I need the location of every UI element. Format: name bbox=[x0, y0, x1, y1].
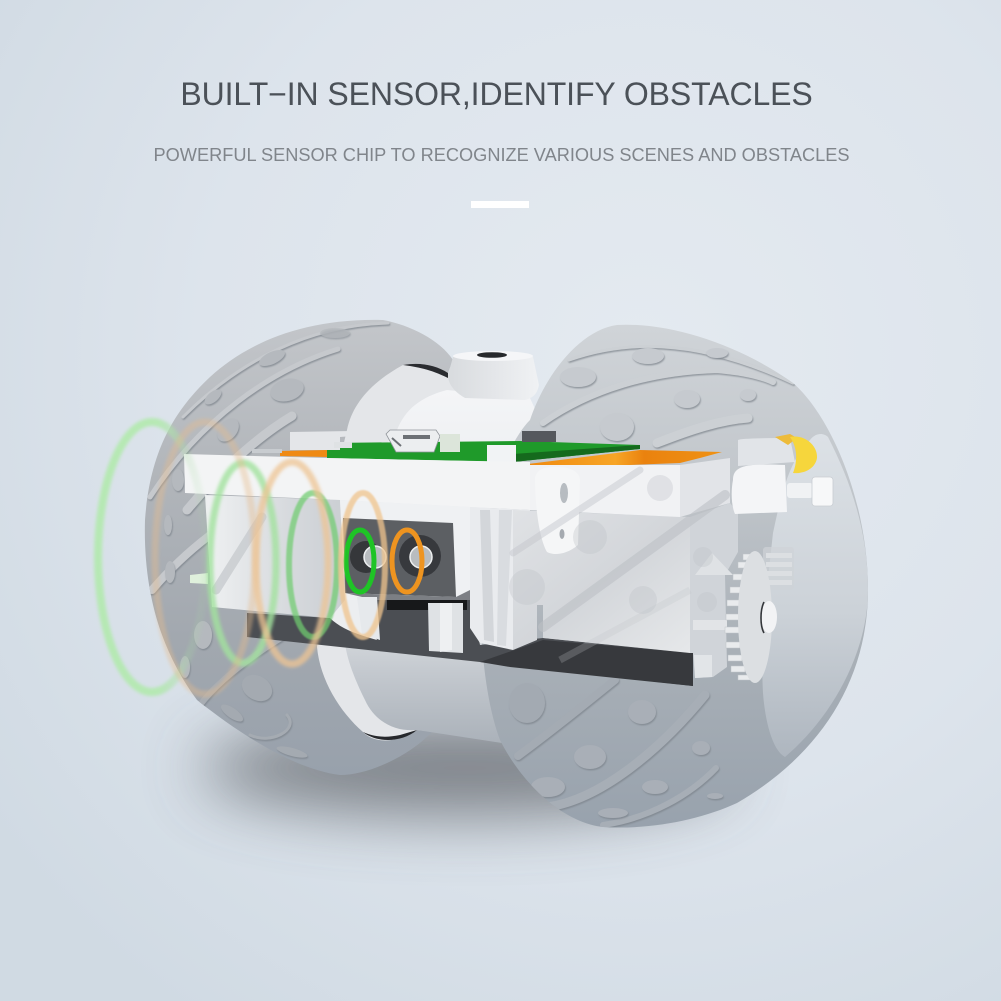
title: BUILT−IN SENSOR,IDENTIFY OBSTACLES bbox=[180, 76, 813, 112]
gear bbox=[725, 547, 794, 683]
body cylinder bbox=[317, 351, 560, 745]
green circuit board bbox=[327, 441, 640, 462]
sensor waves: green bbox=[98, 422, 374, 692]
bracket bbox=[535, 467, 580, 554]
tread dimples bbox=[509, 348, 756, 818]
ground shadow bbox=[200, 720, 730, 816]
board clips bbox=[290, 431, 353, 450]
ir sensor block bbox=[343, 518, 470, 600]
left white bar bbox=[184, 454, 530, 510]
main drum bbox=[345, 390, 540, 745]
internal module bbox=[184, 430, 738, 686]
sensor waves: orange bbox=[155, 422, 422, 694]
illustration: robot with sensor bbox=[0, 173, 868, 1001]
tread ridges bbox=[150, 323, 388, 738]
subtitle: POWERFUL SENSOR CHIP TO RECOGNIZE VARIOUS SCENES AND OBSTACLES bbox=[154, 145, 849, 165]
right box side bbox=[690, 503, 738, 678]
rear hub arch bbox=[317, 364, 560, 745]
dark base plate bbox=[247, 600, 693, 686]
right box front bbox=[513, 510, 690, 653]
top knob bbox=[448, 357, 539, 400]
usb connector bbox=[386, 430, 440, 452]
left wheel bbox=[145, 320, 453, 775]
side cap bbox=[762, 434, 868, 757]
left box bbox=[205, 495, 377, 640]
tread ridges bbox=[518, 346, 793, 825]
divider bar bbox=[471, 201, 529, 208]
centre column bbox=[470, 507, 530, 650]
right wheel bbox=[480, 325, 868, 828]
tread dimples bbox=[164, 328, 350, 760]
translucent wheel features bbox=[509, 475, 717, 614]
orange chip strip bbox=[528, 450, 722, 469]
side axle and bumper bbox=[732, 434, 833, 514]
support legs bbox=[357, 597, 380, 640]
right box top bbox=[530, 465, 680, 517]
sensor mount bbox=[340, 500, 470, 600]
